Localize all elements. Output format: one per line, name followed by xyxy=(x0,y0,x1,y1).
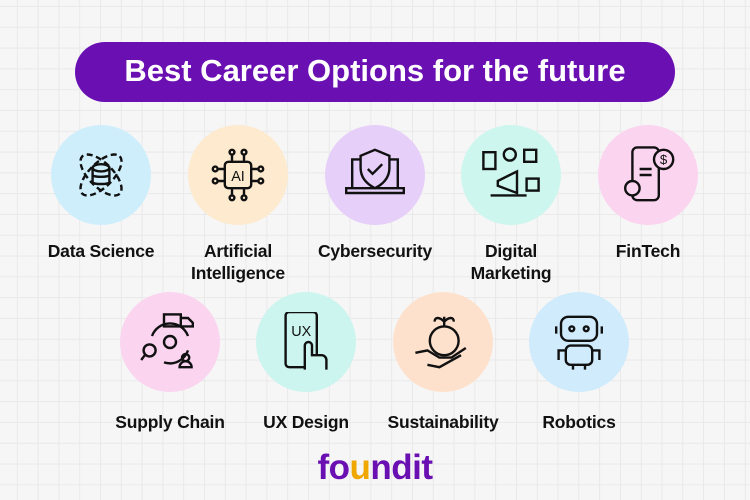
item: Artificial Intelligence: Intelligence xyxy=(191,263,285,283)
item: Digital Marketing xyxy=(461,125,561,283)
item: Data Science xyxy=(48,125,154,261)
item: Robotics: Robotics xyxy=(542,412,616,432)
item: UX Design: UX xyxy=(291,324,312,340)
item: Digital Marketing: Digital xyxy=(485,241,537,261)
item: Data Science: Data Science xyxy=(48,241,154,261)
title xyxy=(75,42,675,102)
item: Sustainability: Sustainability xyxy=(388,412,498,432)
item: Sustainability xyxy=(388,292,499,432)
item: FinTech xyxy=(598,125,698,261)
item: FinTech: FinTech xyxy=(616,241,680,261)
item: Robotics xyxy=(529,292,629,432)
item: Cybersecurity xyxy=(318,125,432,261)
item: Artificial Intelligence: Artificial xyxy=(204,241,272,261)
item: FinTech: $ xyxy=(660,152,668,167)
item: UX Design xyxy=(256,292,356,432)
item: UX Design: UX Design xyxy=(263,412,349,432)
item: Artificial Intelligence xyxy=(188,125,288,283)
item: Digital Marketing: Marketing xyxy=(471,263,551,283)
title: Best Career Options for the future xyxy=(124,53,626,88)
item: Cybersecurity: Cybersecurity xyxy=(318,241,432,261)
item: Supply Chain xyxy=(115,292,225,432)
logo: foundit: foundit xyxy=(317,448,433,487)
item: Supply Chain: Supply Chain xyxy=(115,412,225,432)
item: Artificial Intelligence: AI xyxy=(231,169,245,185)
